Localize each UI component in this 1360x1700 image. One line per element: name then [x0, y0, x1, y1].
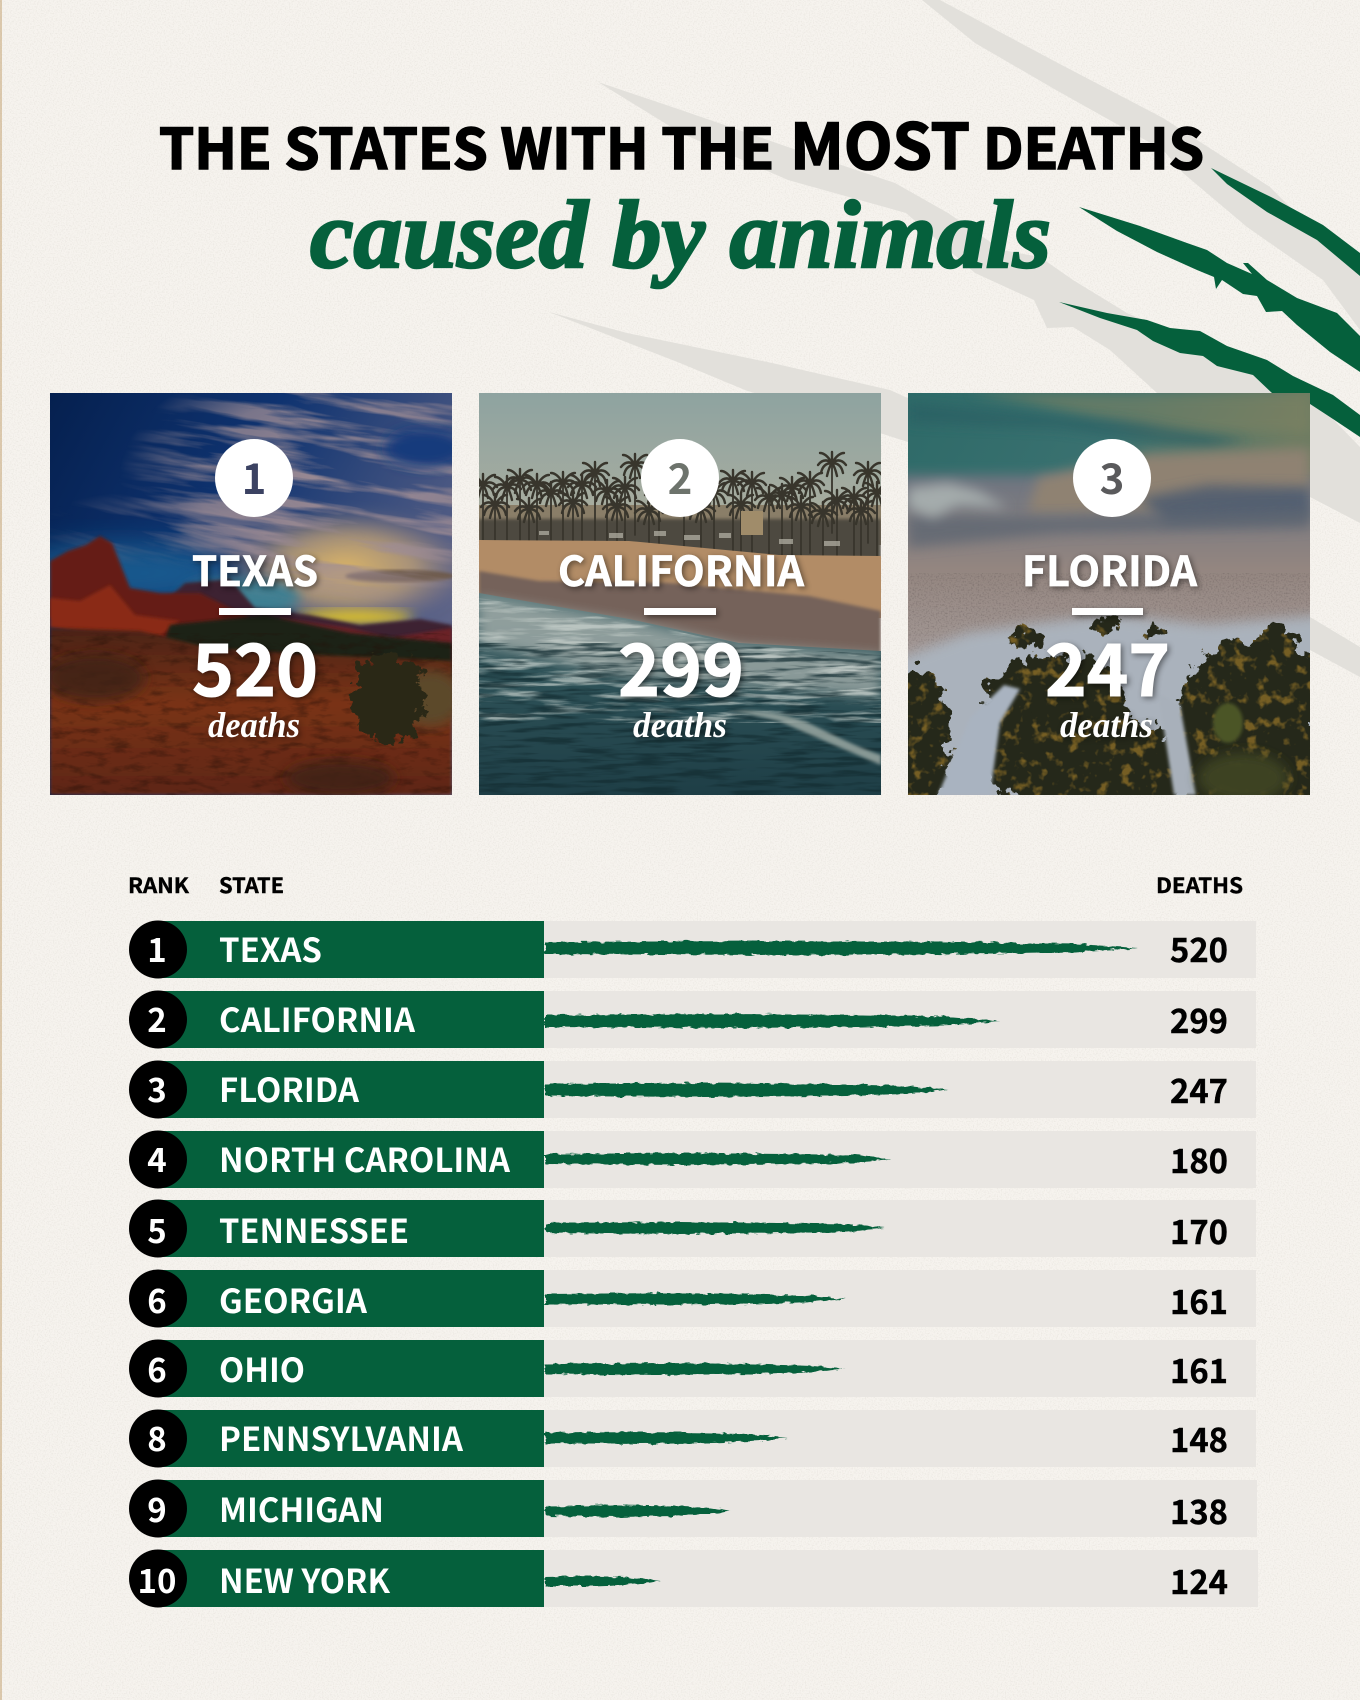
green leaves — [1059, 168, 1360, 437]
row 4 North Carolina: 180 — [1170, 1135, 1228, 1183]
row 2 California: 2 — [147, 994, 167, 1042]
row 3 Florida — [129, 1060, 1256, 1118]
title: DEATHS — [983, 105, 1204, 186]
row 8 Pennsylvania — [129, 1410, 1256, 1468]
table header: STATE — [219, 870, 284, 900]
panel: Florida — [908, 393, 1310, 795]
rank badge 1 — [215, 439, 293, 517]
title: MOST — [790, 97, 970, 188]
state name and total: FLORIDA — [1022, 538, 1198, 598]
row 7 Ohio: 161 — [1170, 1345, 1228, 1393]
row 9 Michigan: 138 — [1170, 1486, 1228, 1534]
row 1 Texas: 1 — [147, 924, 167, 972]
panel: California — [469, 393, 891, 795]
row 4 North Carolina — [129, 1130, 1256, 1188]
row 8 Pennsylvania: PENNSYLVANIA — [219, 1413, 464, 1461]
state name and total: TEXAS — [192, 538, 318, 598]
rank badge 3 — [1073, 439, 1151, 517]
row 10 New York: 10 — [138, 1555, 176, 1603]
row 4 North Carolina: 4 — [147, 1134, 167, 1182]
row 9 Michigan: 9 — [147, 1484, 167, 1532]
row 6 Georgia: 161 — [1170, 1276, 1228, 1324]
photo: California beach — [479, 393, 881, 795]
row 1 Texas — [129, 920, 1256, 978]
state name and total: deaths — [633, 705, 727, 745]
row 7 Ohio: 6 — [147, 1344, 167, 1392]
state name and total: deaths — [1060, 705, 1153, 745]
title — [159, 97, 1204, 188]
rank badge 2: 2 — [668, 446, 692, 507]
state name and total — [1022, 538, 1198, 745]
row 8 Pennsylvania: 148 — [1170, 1414, 1228, 1462]
row 9 Michigan: MICHIGAN — [219, 1484, 384, 1532]
row 1 Texas: 520 — [1170, 924, 1228, 972]
row 3 Florida: 247 — [1170, 1065, 1228, 1113]
rank badge 3: 3 — [1100, 446, 1124, 507]
row 2 California: 299 — [1170, 995, 1228, 1043]
row 5 Tennessee: 170 — [1170, 1206, 1228, 1254]
row 4 North Carolina: NORTH CAROLINA — [219, 1134, 511, 1182]
photo: Texas canyon sunset — [50, 393, 452, 795]
state name and total — [192, 538, 318, 745]
row 7 Ohio: OHIO — [219, 1344, 305, 1392]
panel: Texas — [50, 393, 452, 795]
rank badge 2 — [641, 439, 719, 517]
leaf shadows — [549, 0, 1360, 677]
photo: Florida coast from above — [908, 393, 1310, 795]
state name and total: 247 — [1045, 612, 1170, 717]
state name and total: CALIFORNIA — [558, 538, 805, 598]
row 2 California: CALIFORNIA — [219, 994, 416, 1042]
state name and total: deaths — [208, 705, 300, 745]
row 8 Pennsylvania: 8 — [147, 1413, 167, 1461]
row 3 Florida: 3 — [147, 1064, 167, 1112]
row 5 Tennessee: 5 — [147, 1205, 167, 1253]
title: THE STATES WITH THE — [159, 105, 774, 186]
row 9 Michigan — [129, 1480, 1257, 1538]
subtitle script: caused by animals — [310, 181, 1051, 288]
row 3 Florida: FLORIDA — [219, 1064, 360, 1112]
row 6 Georgia — [129, 1270, 1256, 1328]
state name and total — [558, 538, 805, 745]
row 5 Tennessee — [129, 1200, 1256, 1258]
row 2 California — [129, 990, 1256, 1048]
row 1 Texas: TEXAS — [219, 924, 322, 972]
table header: RANK — [128, 870, 190, 900]
row 10 New York: 124 — [1170, 1556, 1228, 1604]
row 10 New York — [129, 1550, 1258, 1608]
state name and total: 299 — [618, 612, 744, 717]
row 5 Tennessee: TENNESSEE — [219, 1205, 409, 1253]
table header: DEATHS — [1156, 870, 1243, 900]
row 10 New York: NEW YORK — [219, 1555, 390, 1603]
table header — [128, 870, 1243, 900]
row 6 Georgia: GEORGIA — [219, 1275, 368, 1323]
state name and total: 520 — [192, 612, 318, 717]
rank badge 1: 1 — [242, 446, 266, 507]
row 6 Georgia: 6 — [147, 1275, 167, 1323]
row 7 Ohio — [129, 1340, 1256, 1398]
